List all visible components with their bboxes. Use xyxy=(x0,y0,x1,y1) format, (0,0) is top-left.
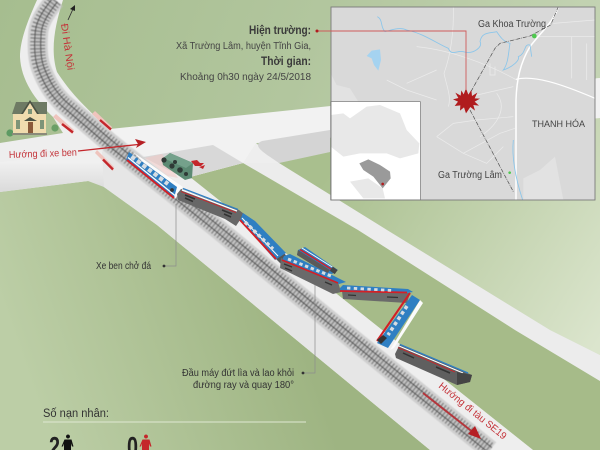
map: lake xyxy=(367,49,381,71)
callout: locomotive: Đầu máy đứt lìa và lao khỏi xyxy=(182,367,294,379)
arrow: truck direction xyxy=(78,139,146,151)
map: minor roads xyxy=(387,7,595,163)
arrow: to Hanoi xyxy=(68,5,75,20)
road: diagonal side road xyxy=(243,163,600,381)
label: train direction: Hướng đi tàu SE19 xyxy=(436,381,509,442)
map: lighter districts xyxy=(331,73,563,200)
info: time heading: Thời gian: xyxy=(261,56,311,68)
carriage 7 xyxy=(377,293,423,350)
info: scene heading: Hiện trường: xyxy=(249,25,311,37)
info: time value: Khoảng 0h30 ngày 24/5/2018 xyxy=(180,72,311,83)
carriage 4 xyxy=(280,254,346,294)
road: shaded band left of track xyxy=(102,143,490,450)
train wreck xyxy=(126,152,472,385)
callout line: scene to map xyxy=(316,30,466,90)
map label: Thanh Hoa: THANH HÓA xyxy=(532,119,586,130)
label: truck direction: Hướng đi xe ben xyxy=(9,148,77,161)
carriage 3 xyxy=(240,213,289,265)
carriage 2, overturned xyxy=(177,188,244,226)
carriage 6 xyxy=(340,285,413,303)
road: shaded verge centre xyxy=(143,145,243,177)
crossing gates xyxy=(53,111,114,171)
label: to Hanoi: Đi Hà Nội xyxy=(58,23,75,71)
icon: house xyxy=(6,100,59,137)
road: shaded verge right xyxy=(258,130,330,163)
callout: locomotive xyxy=(182,285,315,391)
callout: truck: Xe ben chở đá xyxy=(96,260,151,272)
railway track xyxy=(38,0,490,450)
map: railway line xyxy=(470,7,558,192)
carriage 1 xyxy=(126,152,183,199)
map label: Ga Truong Lam: Ga Trường Lâm xyxy=(438,170,502,181)
carriage 8, locomotive xyxy=(395,344,472,385)
truck xyxy=(145,153,205,180)
victims: injured count xyxy=(49,431,74,450)
victims: deaths count xyxy=(127,431,152,450)
map: accident marker xyxy=(453,88,480,113)
map: main roads xyxy=(516,7,595,200)
arrow: train direction xyxy=(423,393,481,439)
info: scene address: Xã Trường Lâm, huyện Tĩnh Gia, xyxy=(176,41,311,52)
map label: Ga Khoa Truong: Ga Khoa Trường xyxy=(478,19,546,30)
road: shaded verge left xyxy=(0,152,118,192)
carriage 5, upper xyxy=(297,247,338,274)
green field: lower left xyxy=(0,181,430,450)
inset map xyxy=(331,102,420,200)
road: crossing road to the right xyxy=(100,78,600,177)
callout: locomotive: đường ray và quay 180° xyxy=(193,380,294,391)
heading: victims: Số nạn nhân: xyxy=(43,408,109,420)
green field: right of diagonal road xyxy=(279,112,600,355)
callout: truck xyxy=(96,204,176,272)
panel: location map xyxy=(331,7,595,200)
divider xyxy=(43,421,306,423)
map: rivers xyxy=(377,17,532,200)
green field: centre xyxy=(190,163,600,450)
map: stations xyxy=(532,34,537,38)
